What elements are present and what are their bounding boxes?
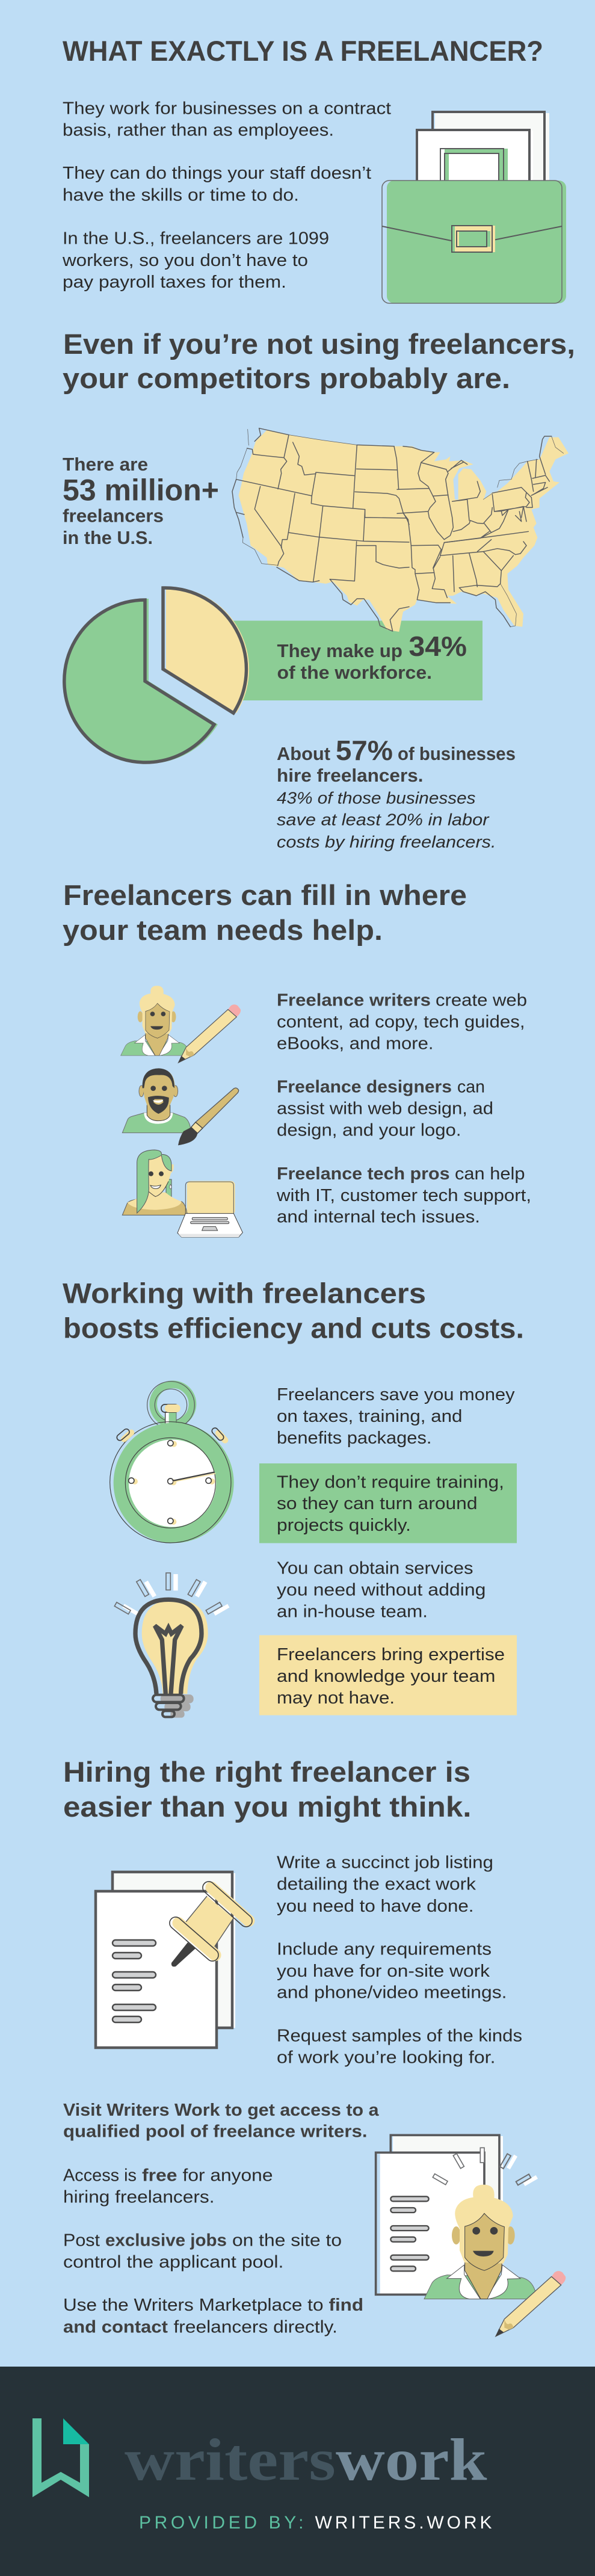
heading: fill in: your team needs help. bbox=[63, 914, 383, 946]
credit line: WRITERS.WORK bbox=[315, 2513, 492, 2533]
callout: no training: They don’t require training, bbox=[277, 1473, 504, 1492]
text: freelance writers: content, ad copy, tech guides, bbox=[277, 1012, 525, 1031]
text: freelance writers bbox=[277, 990, 527, 1053]
text block: freelancer definition: They work for businesses on a contract bbox=[63, 99, 391, 118]
text: in-house team: you need without adding bbox=[277, 1580, 486, 1599]
text: visit Writers Work: Post bbox=[63, 2231, 100, 2250]
text: visit Writers Work: Use the Writers Marketplace to bbox=[63, 2296, 324, 2315]
text: job listing tips: of work you’re looking for. bbox=[277, 2048, 496, 2068]
credit line bbox=[139, 2513, 492, 2533]
text block: freelancer definition: pay payroll taxes for them. bbox=[63, 273, 286, 292]
text block: freelancer definition: They can do things your staff doesn’t bbox=[63, 164, 371, 183]
heading: hiring bbox=[63, 1756, 471, 1823]
text: job listing tips: Write a succinct job listing bbox=[277, 1853, 493, 1873]
stat: 57 percent of businesses: save at least 20% in labor bbox=[277, 810, 490, 829]
icon: writer with documents and pencil bbox=[376, 2135, 566, 2337]
text: freelance writers: Freelance writers bbox=[277, 990, 431, 1010]
heading: competitors bbox=[63, 328, 575, 394]
text: visit Writers Work: on the site to bbox=[232, 2231, 342, 2250]
icon: designer with paintbrush bbox=[122, 1068, 239, 1145]
heading: competitors: Even if you’re not using freelancers, bbox=[63, 328, 575, 360]
footer panel bbox=[0, 2367, 595, 2576]
callout: expertise: Freelancers bring expertise bbox=[277, 1645, 505, 1664]
text: visit Writers Work: exclusive jobs bbox=[105, 2231, 227, 2250]
text: visit Writers Work: for anyone bbox=[183, 2166, 273, 2185]
text: freelance tech pros bbox=[276, 1164, 531, 1226]
stat: 57 percent of businesses: About bbox=[277, 743, 330, 764]
stat: 57 percent of businesses: of businesses bbox=[398, 743, 516, 764]
text: visit Writers Work bbox=[63, 2101, 380, 2337]
text: save money: benefits packages. bbox=[277, 1429, 432, 1448]
callout: expertise: may not have. bbox=[277, 1688, 395, 1708]
icon: tech pro with laptop bbox=[122, 1150, 242, 1237]
logo: writerswork wordmark bbox=[125, 2426, 487, 2493]
text block: freelancer definition: workers, so you don’t have to bbox=[62, 251, 308, 270]
stat: 53 million freelancers: 53 million+ bbox=[63, 473, 219, 507]
text block: freelancer definition: basis, rather than as employees. bbox=[63, 120, 334, 140]
callout panel: green 34 percent band bbox=[226, 621, 482, 700]
text: freelance tech pros: and internal tech issues. bbox=[277, 1207, 480, 1226]
callout: expertise bbox=[259, 1635, 517, 1715]
text: in-house team bbox=[277, 1558, 486, 1621]
logo: writerswork wordmark: writers bbox=[125, 2426, 336, 2493]
text: visit Writers Work: freelancers directly. bbox=[173, 2318, 338, 2337]
text: freelance tech pros: Freelance tech pros bbox=[277, 1164, 450, 1184]
text: in-house team: You can obtain services bbox=[277, 1558, 473, 1578]
text: visit Writers Work: Visit Writers Work to get access to a bbox=[63, 2101, 380, 2120]
stat: 53 million freelancers: There are bbox=[63, 454, 148, 475]
icon: writer with pencil bbox=[121, 986, 241, 1063]
stat: 53 million freelancers: freelancers bbox=[63, 505, 164, 526]
text: freelance writers: create web bbox=[436, 990, 527, 1010]
text: job listing tips: detailing the exact work bbox=[277, 1875, 476, 1894]
icon: pinned documents bbox=[96, 1872, 257, 2048]
map: United States bbox=[232, 428, 569, 632]
heading: competitors: your competitors probably are. bbox=[63, 362, 510, 394]
stat: 57 percent of businesses bbox=[277, 735, 516, 851]
text: visit Writers Work: control the applicant pool. bbox=[63, 2253, 283, 2272]
credit line: PROVIDED BY: bbox=[139, 2513, 303, 2533]
logo: writerswork wordmark: work bbox=[336, 2426, 487, 2493]
pie chart: 34 percent of workforce bbox=[64, 587, 249, 764]
heading: fill in: Freelancers can fill in where bbox=[63, 879, 467, 911]
text: freelance designers: can bbox=[457, 1077, 485, 1096]
icon: stopwatch bbox=[110, 1382, 234, 1543]
text: job listing tips: you need to have done. bbox=[277, 1897, 474, 1916]
callout: make up 34 percent: They make up bbox=[277, 640, 402, 661]
text: job listing tips: Include any requirements bbox=[277, 1940, 492, 1959]
title: WHAT EXACTLY IS A FREELANCER? bbox=[63, 35, 543, 67]
text: freelance designers: design, and your logo. bbox=[277, 1120, 461, 1140]
heading: fill in bbox=[63, 879, 467, 946]
heading: efficiency: boosts efficiency and cuts costs. bbox=[63, 1312, 524, 1344]
heading: hiring: Hiring the right freelancer is bbox=[63, 1756, 470, 1788]
text: freelance tech pros: can help bbox=[455, 1164, 525, 1184]
text: visit Writers Work: hiring freelancers. bbox=[63, 2188, 214, 2207]
text: visit Writers Work: free bbox=[142, 2166, 177, 2185]
callout: make up 34 percent bbox=[277, 631, 467, 683]
heading: efficiency bbox=[63, 1277, 524, 1344]
callout: make up 34 percent: 34% bbox=[409, 631, 467, 662]
text: freelance tech pros: with IT, customer tech support, bbox=[276, 1186, 531, 1205]
stat: 57 percent of businesses: 43% of those businesses bbox=[277, 788, 475, 808]
text: job listing tips: you have for on-site work bbox=[277, 1962, 490, 1981]
stat: 57 percent of businesses: hire freelancers. bbox=[277, 765, 424, 786]
text: save money: on taxes, training, and bbox=[277, 1407, 462, 1426]
callout: no training: projects quickly. bbox=[277, 1516, 411, 1535]
callout: expertise: and knowledge your team bbox=[277, 1667, 496, 1686]
callout: make up 34 percent: of the workforce. bbox=[277, 662, 432, 683]
heading: hiring: easier than you might think. bbox=[63, 1791, 471, 1823]
text: job listing tips bbox=[277, 1853, 522, 2068]
text: save money: Freelancers save you money bbox=[277, 1385, 515, 1404]
stat: 53 million freelancers bbox=[63, 454, 219, 548]
text: visit Writers Work: qualified pool of freelance writers. bbox=[63, 2122, 367, 2141]
text block: freelancer definition: In the U.S., freelancers are 1099 bbox=[63, 229, 329, 248]
text: visit Writers Work: and contact bbox=[63, 2318, 168, 2337]
text: freelance designers: assist with web design, ad bbox=[277, 1099, 493, 1118]
logo: bookmark mark bbox=[32, 2418, 89, 2497]
text: job listing tips: and phone/video meetings. bbox=[277, 1983, 507, 2003]
stat: 53 million freelancers: in the U.S. bbox=[63, 527, 153, 548]
text: in-house team: an in-house team. bbox=[277, 1602, 428, 1621]
text: freelance designers bbox=[277, 1077, 493, 1140]
text: visit Writers Work: find bbox=[328, 2296, 363, 2315]
stat: 57 percent of businesses: 57% bbox=[336, 735, 393, 766]
text: job listing tips: Request samples of the kinds bbox=[277, 2027, 522, 2046]
icon: briefcase with papers bbox=[382, 112, 566, 303]
icon: light bulb bbox=[114, 1573, 230, 1718]
text: visit Writers Work: Access is bbox=[63, 2166, 137, 2185]
text: freelance designers: Freelance designers bbox=[277, 1077, 452, 1096]
callout: no training bbox=[259, 1463, 517, 1543]
text block: freelancer definition bbox=[62, 99, 391, 292]
text: save money bbox=[277, 1385, 515, 1448]
text block: freelancer definition: have the skills or time to do. bbox=[63, 185, 299, 205]
text: freelance writers: eBooks, and more. bbox=[277, 1034, 433, 1053]
stat: 57 percent of businesses: costs by hiring freelancers. bbox=[277, 833, 496, 851]
callout: no training: so they can turn around bbox=[277, 1494, 478, 1513]
heading: efficiency: Working with freelancers bbox=[63, 1277, 426, 1309]
